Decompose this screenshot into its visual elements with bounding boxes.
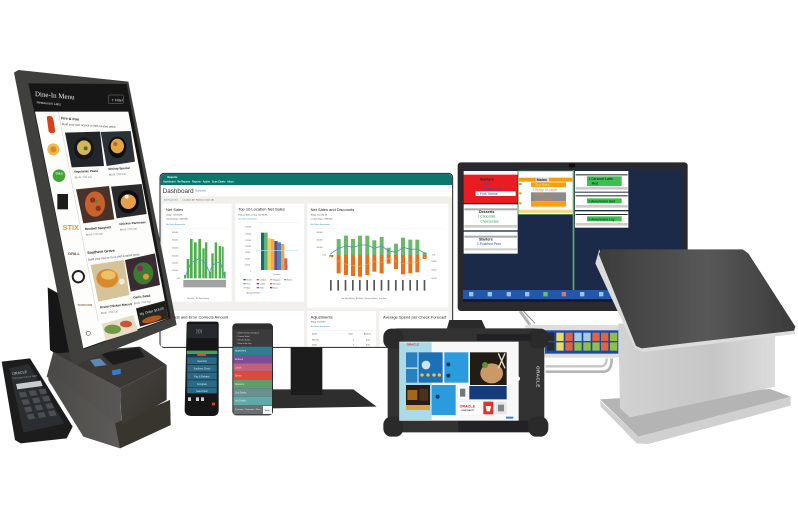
report navigation: Dashboard My Reports Reports Audits Scan Charts Inbox xyxy=(163,181,234,184)
printer xyxy=(47,352,122,430)
ticket: starters red: 1 Pate xyxy=(480,182,490,186)
self-service kiosk: $8.00 / 700 Cal xyxy=(75,176,92,179)
self-service kiosk: Meatball Spaghetti xyxy=(85,225,112,231)
card: net sales: 600,000 xyxy=(172,239,178,241)
legend: Singapore xyxy=(273,279,281,281)
payment menu buttons xyxy=(187,357,217,393)
restaurant logos: TANDOOR xyxy=(77,303,93,307)
dashboard monitor stand xyxy=(272,347,377,408)
section heading: fire and iron: Fire & Iron xyxy=(61,116,79,122)
legend: Paris xyxy=(246,283,250,285)
card: net sales: 500,000 xyxy=(172,247,178,249)
card: net sales and discounts xyxy=(307,204,448,308)
card: net sales: Current Days: 7,085,340 xyxy=(166,217,189,220)
food photo: grand chicken biscuit xyxy=(91,260,129,302)
ticket: americano sml xyxy=(575,193,628,210)
ticket: starters white xyxy=(464,232,518,254)
card: top 10 location net sales: 0 xyxy=(250,270,251,272)
restaurant logos: STIX xyxy=(63,223,79,232)
card: net sales: Today: 714,794.98 xyxy=(166,214,183,216)
self-service kiosk stand and printer xyxy=(47,287,171,448)
card: top 10 location net sales: 25,000 xyxy=(245,264,250,266)
card: adjustments: Total xyxy=(348,332,353,335)
food photo: chicken parmesan xyxy=(111,184,147,218)
food photo: garlic salad xyxy=(125,253,160,292)
kiosk content area xyxy=(35,112,168,348)
card: average spend forecast: Average Spend per Check Forecast xyxy=(383,314,447,319)
legend: Seattle xyxy=(246,278,252,281)
ticket: starters white: Starters xyxy=(479,237,493,241)
report navigation xyxy=(163,175,234,184)
base xyxy=(600,389,791,444)
order item rows xyxy=(237,333,259,345)
card: average spend forecast xyxy=(379,311,448,346)
card: net sales and discounts: Net Sales and Discounts xyxy=(311,207,354,212)
card reader handheld xyxy=(2,358,73,443)
kiosk header text: Restaurant Labs xyxy=(37,100,61,106)
card: top 10 location net sales: 75,000 xyxy=(245,252,250,254)
card: net sales: 0.00 xyxy=(177,278,180,280)
card: top 10 location net sales: Top 10 Location Net Sales xyxy=(238,207,285,212)
taskbar xyxy=(463,290,682,302)
card: adjustments: Name xyxy=(312,333,318,335)
card: net sales and discounts: 20,000 xyxy=(431,261,436,263)
section heading: fire and iron xyxy=(61,116,116,129)
card: top 10 location net sales: Locations xyxy=(273,273,281,276)
card reader handheld: ORACLE xyxy=(12,370,28,376)
food photo: vegetarian pasta xyxy=(65,132,104,167)
bump bar keypad xyxy=(525,325,620,358)
card: top 10 location net sales: 175,000 xyxy=(245,227,251,229)
legend: Rome xyxy=(260,287,264,289)
order item rows: 2 Caesar Salad xyxy=(237,336,249,338)
order item rows: 1 Garden Burger xyxy=(237,339,251,341)
ticket: americano lrg: 1 Americano Lrg xyxy=(588,217,614,221)
kitchen display monitor xyxy=(458,162,688,311)
ticket: desserts: Desserts xyxy=(479,210,494,214)
ticket: starters red: 1 Pork Terrine xyxy=(477,192,498,196)
section heading: southern grove: Build your own or try a chef curated piece xyxy=(88,252,140,262)
card: net sales: Net Sales Net Sales Moving xyxy=(187,297,209,300)
column xyxy=(618,323,775,417)
legend: Lombard xyxy=(260,279,266,281)
card: net sales and discounts: 0.00 xyxy=(432,255,435,257)
card: net sales: 100,000 xyxy=(172,270,178,272)
card: net sales xyxy=(163,204,232,302)
section heading: southern grove: Southern Grove xyxy=(87,249,115,255)
card: net sales: 300,000 xyxy=(172,255,178,257)
rugged tablet xyxy=(383,320,548,437)
card: adjustments: Amount xyxy=(364,332,371,335)
ticket: mains orange: 1 Roast xyxy=(532,193,544,197)
payment menu buttons: Complete xyxy=(197,383,208,386)
category rows: Desserts xyxy=(235,383,245,386)
screen xyxy=(599,249,795,348)
net sales bars xyxy=(184,239,226,278)
category rows: Functions Payments Menu xyxy=(235,408,261,411)
ticket: desserts: 1 Chocolate xyxy=(478,215,496,219)
ticket: starters red xyxy=(464,171,518,203)
payment handheld: )))) xyxy=(196,329,203,334)
order total banner xyxy=(136,301,168,327)
card: adjustments: 4 xyxy=(353,339,355,341)
ticket: mains orange: Sea Bass xyxy=(535,183,550,187)
order item rows: 1 Soup of the Day xyxy=(237,342,251,345)
card: net sales and discounts: 600,000 xyxy=(317,239,323,241)
self-service kiosk: $8.00 / 700 Cal xyxy=(86,232,103,237)
self-service kiosk: Vegetarian Pasta xyxy=(74,169,98,174)
card: net sales and discounts: 60,000 xyxy=(431,278,436,280)
legend: Warszawa xyxy=(273,283,281,285)
base xyxy=(48,370,171,448)
food photo: shrimp special xyxy=(101,131,135,166)
category rows: Lunch xyxy=(235,367,242,369)
legend: Munich xyxy=(287,279,292,281)
card: net sales and discounts: Net Sales Moving Net Sales Discounts Moving Discounts xyxy=(342,297,386,300)
card: adjustments: Adjustments xyxy=(311,314,333,319)
card: net sales and discounts: Today: 714,794.98 xyxy=(311,214,328,216)
ticket: mains orange: Mains xyxy=(537,178,547,182)
card: adjustments: Net Sales Expression xyxy=(311,325,330,328)
order item rows: 1 Grilled Chicken Sandwich xyxy=(237,333,259,335)
restaurant logos: CHILLI xyxy=(56,174,64,176)
mobile order phone xyxy=(232,323,273,415)
card: net sales: 200,000 xyxy=(172,262,178,264)
card: net sales and discounts: 800,000 xyxy=(317,232,323,234)
legend: Average Net Sales xyxy=(247,291,261,294)
ticket: starters white: 1 Poached Pear xyxy=(477,242,502,246)
ticket: desserts xyxy=(464,204,518,230)
card: adjustments: 4 xyxy=(353,345,355,347)
card: top 10 location net sales: 50,000 xyxy=(245,258,250,260)
card reader handheld: Insert your card or login xyxy=(12,374,38,380)
self-service kiosk: Chicken Parmesan xyxy=(119,220,146,226)
home button xyxy=(515,376,520,381)
card: net sales: Net Sales xyxy=(166,207,183,212)
payment handheld xyxy=(185,322,219,416)
ticket: caramel latte: 1 Caramel Latte xyxy=(588,177,613,181)
card: top 10 location net sales xyxy=(235,204,304,302)
dashboard monitor xyxy=(160,173,453,347)
tablet screen: ORACLE xyxy=(460,404,476,408)
ticket: mains orange: Vegetables xyxy=(535,197,552,201)
legend xyxy=(243,278,292,294)
self-service kiosk: Shrimp Special xyxy=(108,166,130,171)
card: net sales and discounts: 400,000 xyxy=(317,247,323,249)
payment menu buttons: Inventory xyxy=(197,360,208,363)
self-service kiosk: Grand Chicken Biscuit xyxy=(100,302,132,309)
payment menu buttons: Southern Check xyxy=(194,368,211,371)
ticket: americano sml: 1 Americano Sml xyxy=(588,199,615,203)
self-service kiosk: $8.00 / 700 Cal xyxy=(109,173,126,177)
payment menu buttons: Pay & Release xyxy=(194,376,210,378)
report navigation: Reports xyxy=(167,175,178,179)
card: net sales and discounts: Net Sales Expression xyxy=(311,223,330,226)
order total banner: My Order $18.00 xyxy=(139,306,165,316)
ticket: mains orange: 1 Rump of Lamb xyxy=(532,188,557,192)
tablet screen: HOSPITALITY xyxy=(461,409,475,412)
ticket: desserts: Cheesecake xyxy=(480,219,499,223)
dashboard monitor: Edit Parameters xyxy=(164,199,178,202)
ticket: caramel latte: Med xyxy=(592,182,598,186)
card: adjustments: Returns xyxy=(312,338,319,341)
card: net sales and discounts: 0.00 xyxy=(323,255,326,257)
tablet screen xyxy=(399,342,519,421)
bezel xyxy=(595,249,795,352)
card: top 10 location net sales: 100,000 xyxy=(245,246,251,248)
legend: Milan xyxy=(246,287,250,289)
ticket: caramel latte xyxy=(575,171,628,192)
restaurant logos xyxy=(47,116,93,335)
card: net sales: 800,000 xyxy=(172,232,178,234)
category rows: Hot Drinks xyxy=(235,400,247,403)
kiosk header text: T Filter xyxy=(112,99,124,103)
legend: London xyxy=(260,283,265,285)
legend: Seoul xyxy=(273,287,278,289)
self-service kiosk xyxy=(14,70,177,365)
category rows: Drinks xyxy=(235,375,242,378)
dashboard monitor: Customize xyxy=(195,189,207,192)
countertop POS terminal xyxy=(595,249,795,444)
ticket: americano lrg xyxy=(575,211,628,228)
category rows: Entrees xyxy=(235,358,244,361)
card: adjustments xyxy=(307,311,376,347)
category rows: Appetizers xyxy=(235,350,247,353)
self-service kiosk: $8.00 / 700 Cal xyxy=(120,227,137,232)
card: adjustments: Voids xyxy=(312,345,317,347)
ticket: starters red: Brioche Toast xyxy=(482,187,503,191)
kiosk header text xyxy=(35,90,124,106)
card: adjustments: 0.00 xyxy=(366,345,371,347)
kitchen display monitor stand and cables xyxy=(520,311,612,372)
location bars xyxy=(261,233,287,270)
card: voids and error corrects: Voids and Error Corrects Amount xyxy=(170,314,229,319)
kiosk header text: Dine-In Menu xyxy=(35,90,75,102)
card: net sales and discounts: Current Days: 7,085,340 xyxy=(311,217,333,220)
card: top 10 location net sales: 125,000 xyxy=(245,240,251,242)
self-service kiosk: $8.00 / 700 Cal xyxy=(134,300,151,305)
tablet brand: ORACLE xyxy=(536,366,541,388)
food photo: sandwich xyxy=(102,315,138,341)
section heading: fire and iron: Build your own or pick a chef curated piece xyxy=(62,122,116,129)
card: adjustments: 0.00 xyxy=(366,339,371,341)
card: adjustments: Today: 714794.9 xyxy=(311,322,326,324)
card: net sales and discounts: 40,000 xyxy=(431,270,436,272)
net sales bars xyxy=(337,236,427,255)
ticket: starters red: Starters xyxy=(480,177,494,181)
category rows xyxy=(233,347,272,414)
restaurant logos: GRILL xyxy=(68,251,81,256)
card: top 10 location net sales: Net Unit Comparison xyxy=(238,218,257,221)
ticket: mains orange xyxy=(518,171,573,214)
food photo: meatball spaghetti xyxy=(76,186,114,223)
discount bars xyxy=(329,255,427,277)
dashboard monitor: Locations: All Revenue Center: All xyxy=(183,199,214,202)
card: net sales: Net Sales Expression xyxy=(166,223,185,226)
card: top 10 location net sales: Forecast Sales vs Day: 714,794.98 xyxy=(238,213,267,216)
card: voids and error corrects xyxy=(163,311,304,346)
self-service kiosk: Garlic Salad xyxy=(133,294,151,300)
dashboard title: Dashboard xyxy=(163,188,194,195)
card: top 10 location net sales: 150,000 xyxy=(245,233,251,235)
tablet screen: ORACLE xyxy=(407,342,419,346)
keypad xyxy=(19,388,57,420)
category rows: Soft Drinks xyxy=(235,391,247,394)
self-service kiosk: $8.00 / 700 Cal xyxy=(101,310,118,315)
payment menu buttons: Select Item xyxy=(196,390,208,393)
category rows: Send xyxy=(265,410,269,412)
